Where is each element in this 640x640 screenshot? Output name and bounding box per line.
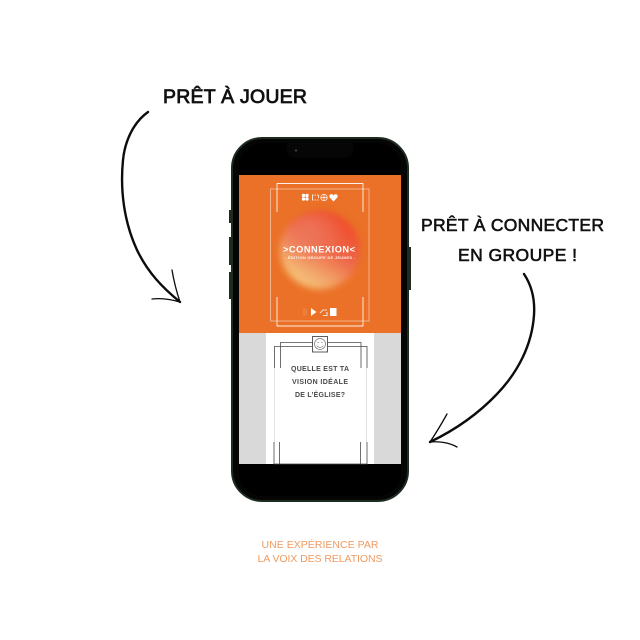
- phone body: [232, 138, 408, 501]
- card frame lines: [274, 342, 367, 464]
- arrow: from connecter en groupe to the white card: [430, 274, 534, 447]
- heading: prêt à jouer: PRÊT À JOUER: [163, 85, 307, 108]
- card subtitle: - ÉDITION GROUPE DE JEUNES -: [285, 255, 356, 260]
- question text: VISION IDÉALE: [292, 377, 348, 386]
- card title: >CONNEXION<: [283, 244, 355, 254]
- arrow: from prêt à jouer to the orange card: [122, 112, 180, 302]
- card frame lines: [270, 184, 369, 326]
- heading: prêt à connecter en groupe: [421, 215, 604, 265]
- phone side buttons: [229, 210, 411, 299]
- notch with camera: [287, 143, 353, 158]
- question text: [291, 366, 349, 399]
- phone mockup: [229, 138, 411, 501]
- footer credit: UNE EXPÉRIENCE PAR: [262, 538, 379, 551]
- top icon row: [302, 194, 338, 202]
- screen black area: [239, 143, 401, 496]
- footer credit: [258, 538, 382, 565]
- question card: [266, 333, 374, 464]
- gray screen panel: [239, 333, 401, 464]
- bottom icon row: [304, 308, 336, 316]
- gradient blob: [280, 211, 360, 289]
- heading: prêt à connecter en groupe: PRÊT À CONNECTER: [421, 215, 604, 235]
- card background: [266, 333, 374, 464]
- icon: smiley in box: [312, 336, 328, 352]
- orange screen panel: [239, 175, 401, 333]
- game card cover: [270, 184, 369, 326]
- footer credit: LA VOIX DES RELATIONS: [258, 553, 382, 565]
- question text: DE L’ÉGLISE?: [295, 390, 345, 399]
- heading: prêt à connecter en groupe: EN GROUPE !: [458, 245, 577, 265]
- question text: QUELLE EST TA: [291, 366, 349, 373]
